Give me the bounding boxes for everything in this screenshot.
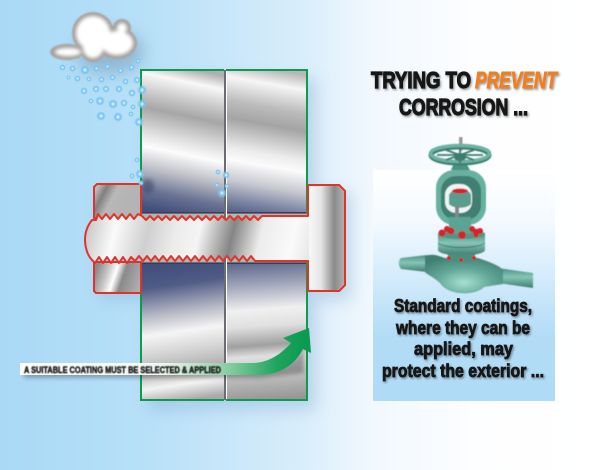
valve bolts [438, 226, 483, 262]
valve handwheel [430, 137, 490, 164]
caption text: applied, may [414, 339, 513, 359]
caption text: Standard coatings, [394, 296, 532, 316]
valve flange [438, 229, 485, 262]
valve pipes and body [399, 255, 533, 293]
valve yoke [436, 163, 486, 234]
nut [94, 184, 141, 293]
panel: valve and caption background [373, 170, 555, 401]
caption text: protect the exterior ... [382, 361, 544, 381]
title: CORROSION ... [399, 94, 528, 120]
plates: four metal quadrants with green outline [141, 70, 308, 400]
icon: storm cloud [50, 12, 144, 74]
caption text [382, 296, 544, 381]
title: TRYING TO [371, 67, 471, 93]
water droplets [59, 58, 230, 198]
bolt with threaded shaft and head [85, 185, 345, 291]
shadow behind fastened plates [100, 78, 352, 410]
caption text: where they can be [395, 318, 530, 338]
icon: valve [399, 137, 533, 293]
arrow caption: A SUITABLE COATING MUST BE SELECTED & APPLIED [24, 365, 221, 376]
arrow: coating callout [20, 328, 311, 378]
title [371, 67, 558, 120]
title: PREVENT [475, 67, 558, 93]
